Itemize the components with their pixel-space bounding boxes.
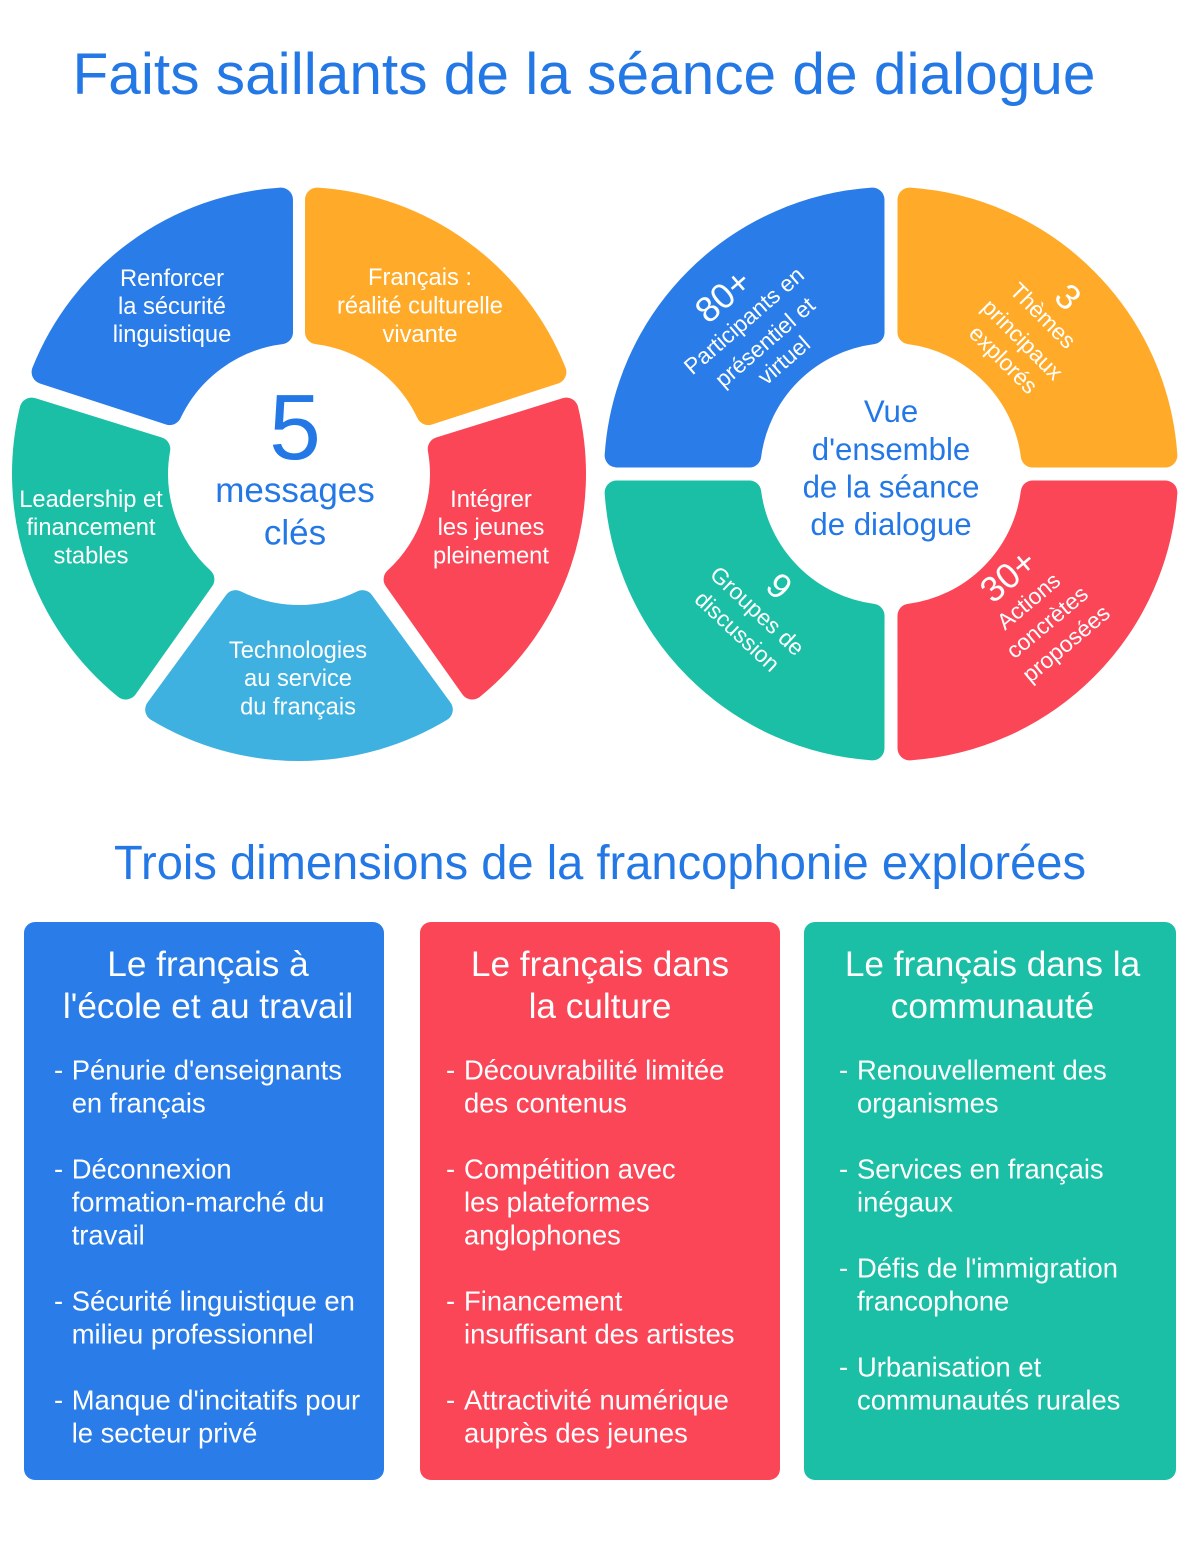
chart: session overview donut bbox=[569, 152, 1200, 796]
list: organismes bbox=[857, 1088, 999, 1119]
panel heading: Le français à bbox=[107, 945, 309, 984]
centre label: 5 messages clés: 5 bbox=[269, 375, 321, 479]
centre label: Vue d'ensemble de la séance de dialogue bbox=[803, 394, 979, 542]
list: travail bbox=[72, 1220, 145, 1251]
segment: 3 thèmes principaux: explorés bbox=[964, 320, 1043, 399]
list bbox=[446, 1055, 734, 1449]
segment: Technologies au service du français bbox=[157, 602, 441, 749]
list: Défis de l'immigration bbox=[857, 1253, 1118, 1284]
list: le secteur privé bbox=[72, 1418, 257, 1449]
list: Financement bbox=[464, 1286, 623, 1317]
segment: Intégrer les jeunes pleinement bbox=[371, 375, 607, 701]
list: des contenus bbox=[464, 1088, 627, 1119]
segment: 30+ actions concrètes: proposées bbox=[1017, 599, 1115, 687]
list: - bbox=[54, 1385, 63, 1416]
list: - bbox=[839, 1055, 848, 1086]
chart: five key messages donut bbox=[0, 165, 607, 749]
segment: 80+ participants: présentiel et bbox=[710, 291, 820, 392]
list: francophone bbox=[857, 1286, 1009, 1317]
segment: 80+ participants bbox=[569, 152, 939, 522]
list: Manque d'incitatifs pour bbox=[72, 1385, 360, 1416]
list: formation-marché du bbox=[72, 1187, 324, 1218]
list: anglophones bbox=[464, 1220, 621, 1251]
segment: Leadership et financement stables bbox=[0, 375, 227, 701]
centre label: Vue d'ensemble de la séance de dialogue: Vue bbox=[864, 394, 918, 429]
segment: Intégrer les jeunes pleinement: pleinement bbox=[433, 544, 549, 570]
list bbox=[839, 1055, 1120, 1416]
segment: Renforcer la sécurité linguistique bbox=[19, 165, 344, 459]
list: - bbox=[446, 1154, 455, 1185]
segment: Intégrer les jeunes pleinement: Intégrer bbox=[450, 487, 532, 513]
panel heading: la culture bbox=[529, 987, 671, 1026]
panel heading bbox=[845, 945, 1141, 1026]
list: communautés rurales bbox=[857, 1385, 1120, 1416]
panel: Le français à l'école et au travail bbox=[24, 922, 384, 1480]
segment: 30+ actions concrètes: concrètes bbox=[1001, 580, 1093, 663]
list: les plateformes bbox=[464, 1187, 650, 1218]
segment: Français réalité culturelle vivante: vivante bbox=[382, 322, 458, 348]
list: Renouvellement des bbox=[857, 1055, 1107, 1086]
centre label: Vue d'ensemble de la séance de dialogue: d'ensemble bbox=[812, 432, 970, 467]
list: inégaux bbox=[857, 1187, 953, 1218]
list: Sécurité linguistique en bbox=[72, 1286, 355, 1317]
segment: 80+ participants: Participants en bbox=[679, 261, 809, 380]
list: - bbox=[54, 1055, 63, 1086]
segment: 80+ participants: 80+ bbox=[687, 261, 759, 331]
list: Compétition avec bbox=[464, 1154, 676, 1185]
panel heading: Le français dans bbox=[471, 945, 729, 984]
segment: Renforcer la sécurité linguistique: linguistique bbox=[113, 322, 231, 348]
title: Faits saillants de la séance de dialogue bbox=[72, 42, 1096, 107]
list: Pénurie d'enseignants bbox=[72, 1055, 342, 1086]
list: Déconnexion bbox=[72, 1154, 232, 1185]
segment: 3 thèmes principaux bbox=[843, 152, 1200, 522]
section heading: Trois dimensions de la francophonie explorées bbox=[114, 837, 1086, 890]
list: - bbox=[446, 1055, 455, 1086]
list: en français bbox=[72, 1088, 206, 1119]
segment: Français réalité culturelle vivante: Français : bbox=[368, 265, 472, 291]
centre label: 5 messages clés bbox=[215, 375, 375, 552]
list: Découvrabilité limitée bbox=[464, 1055, 724, 1086]
centre label: 5 messages clés: messages bbox=[215, 471, 375, 510]
segment: Renforcer la sécurité linguistique: la sécurité bbox=[118, 294, 226, 320]
list: insuffisant des artistes bbox=[464, 1319, 734, 1350]
segment: Technologies au service du français: Technologies bbox=[229, 638, 367, 664]
segment: 80+ participants: virtuel bbox=[752, 330, 815, 390]
segment: 3 thèmes principaux: 3 bbox=[1047, 276, 1089, 318]
list: Urbanisation et bbox=[857, 1352, 1042, 1383]
segment: Renforcer la sécurité linguistique: Renforcer bbox=[120, 266, 224, 292]
segment: Intégrer les jeunes pleinement: les jeunes bbox=[438, 515, 544, 541]
list: auprès des jeunes bbox=[464, 1418, 688, 1449]
segment: Leadership et financement stables: stables bbox=[53, 544, 129, 570]
segment: Français réalité culturelle vivante: réalité culturelle bbox=[337, 294, 503, 320]
segment: Leadership et financement stables: financement bbox=[26, 515, 156, 541]
list: Services en français bbox=[857, 1154, 1104, 1185]
segment: 9 groupes de discussion: Groupes de bbox=[705, 561, 810, 661]
panel: Le français dans la culture bbox=[420, 922, 780, 1480]
panel heading: l'école et au travail bbox=[63, 987, 353, 1026]
segment: 3 thèmes principaux: Thèmes bbox=[1005, 277, 1081, 354]
list: - bbox=[839, 1154, 848, 1185]
segment: Technologies au service du français: au service bbox=[244, 666, 352, 692]
segment: 9 groupes de discussion: 9 bbox=[758, 565, 800, 608]
centre label: Vue d'ensemble de la séance de dialogue: de la séance bbox=[803, 470, 979, 504]
centre label: Vue d'ensemble de la séance de dialogue: de dialogue bbox=[810, 507, 972, 542]
list: - bbox=[839, 1352, 848, 1383]
segment: 3 thèmes principaux: principaux bbox=[977, 294, 1069, 386]
segment: Technologies au service du français: du français bbox=[240, 694, 356, 720]
list: - bbox=[839, 1253, 848, 1284]
list: - bbox=[446, 1286, 455, 1317]
list bbox=[54, 1055, 360, 1449]
panel heading bbox=[471, 945, 729, 1026]
segment: 9 groupes de discussion bbox=[569, 426, 939, 796]
panel: Le français dans la communauté bbox=[804, 922, 1176, 1480]
panel heading: communauté bbox=[891, 987, 1094, 1026]
list: Attractivité numérique bbox=[464, 1385, 729, 1416]
panel heading: Le français dans la bbox=[845, 945, 1141, 984]
segment: 30+ actions concrètes bbox=[843, 426, 1200, 796]
segment: Français réalité culturelle vivante bbox=[254, 165, 579, 459]
segment: 30+ actions concrètes: Actions bbox=[992, 567, 1065, 635]
panel heading bbox=[63, 945, 353, 1026]
segment: 9 groupes de discussion: discussion bbox=[690, 586, 785, 677]
list: - bbox=[54, 1154, 63, 1185]
centre label: 5 messages clés: clés bbox=[264, 514, 326, 552]
list: - bbox=[54, 1286, 63, 1317]
list: milieu professionnel bbox=[72, 1319, 314, 1350]
list: - bbox=[446, 1385, 455, 1416]
segment: 30+ actions concrètes: 30+ bbox=[972, 541, 1044, 610]
segment: Leadership et financement stables: Leadership et bbox=[19, 487, 163, 513]
